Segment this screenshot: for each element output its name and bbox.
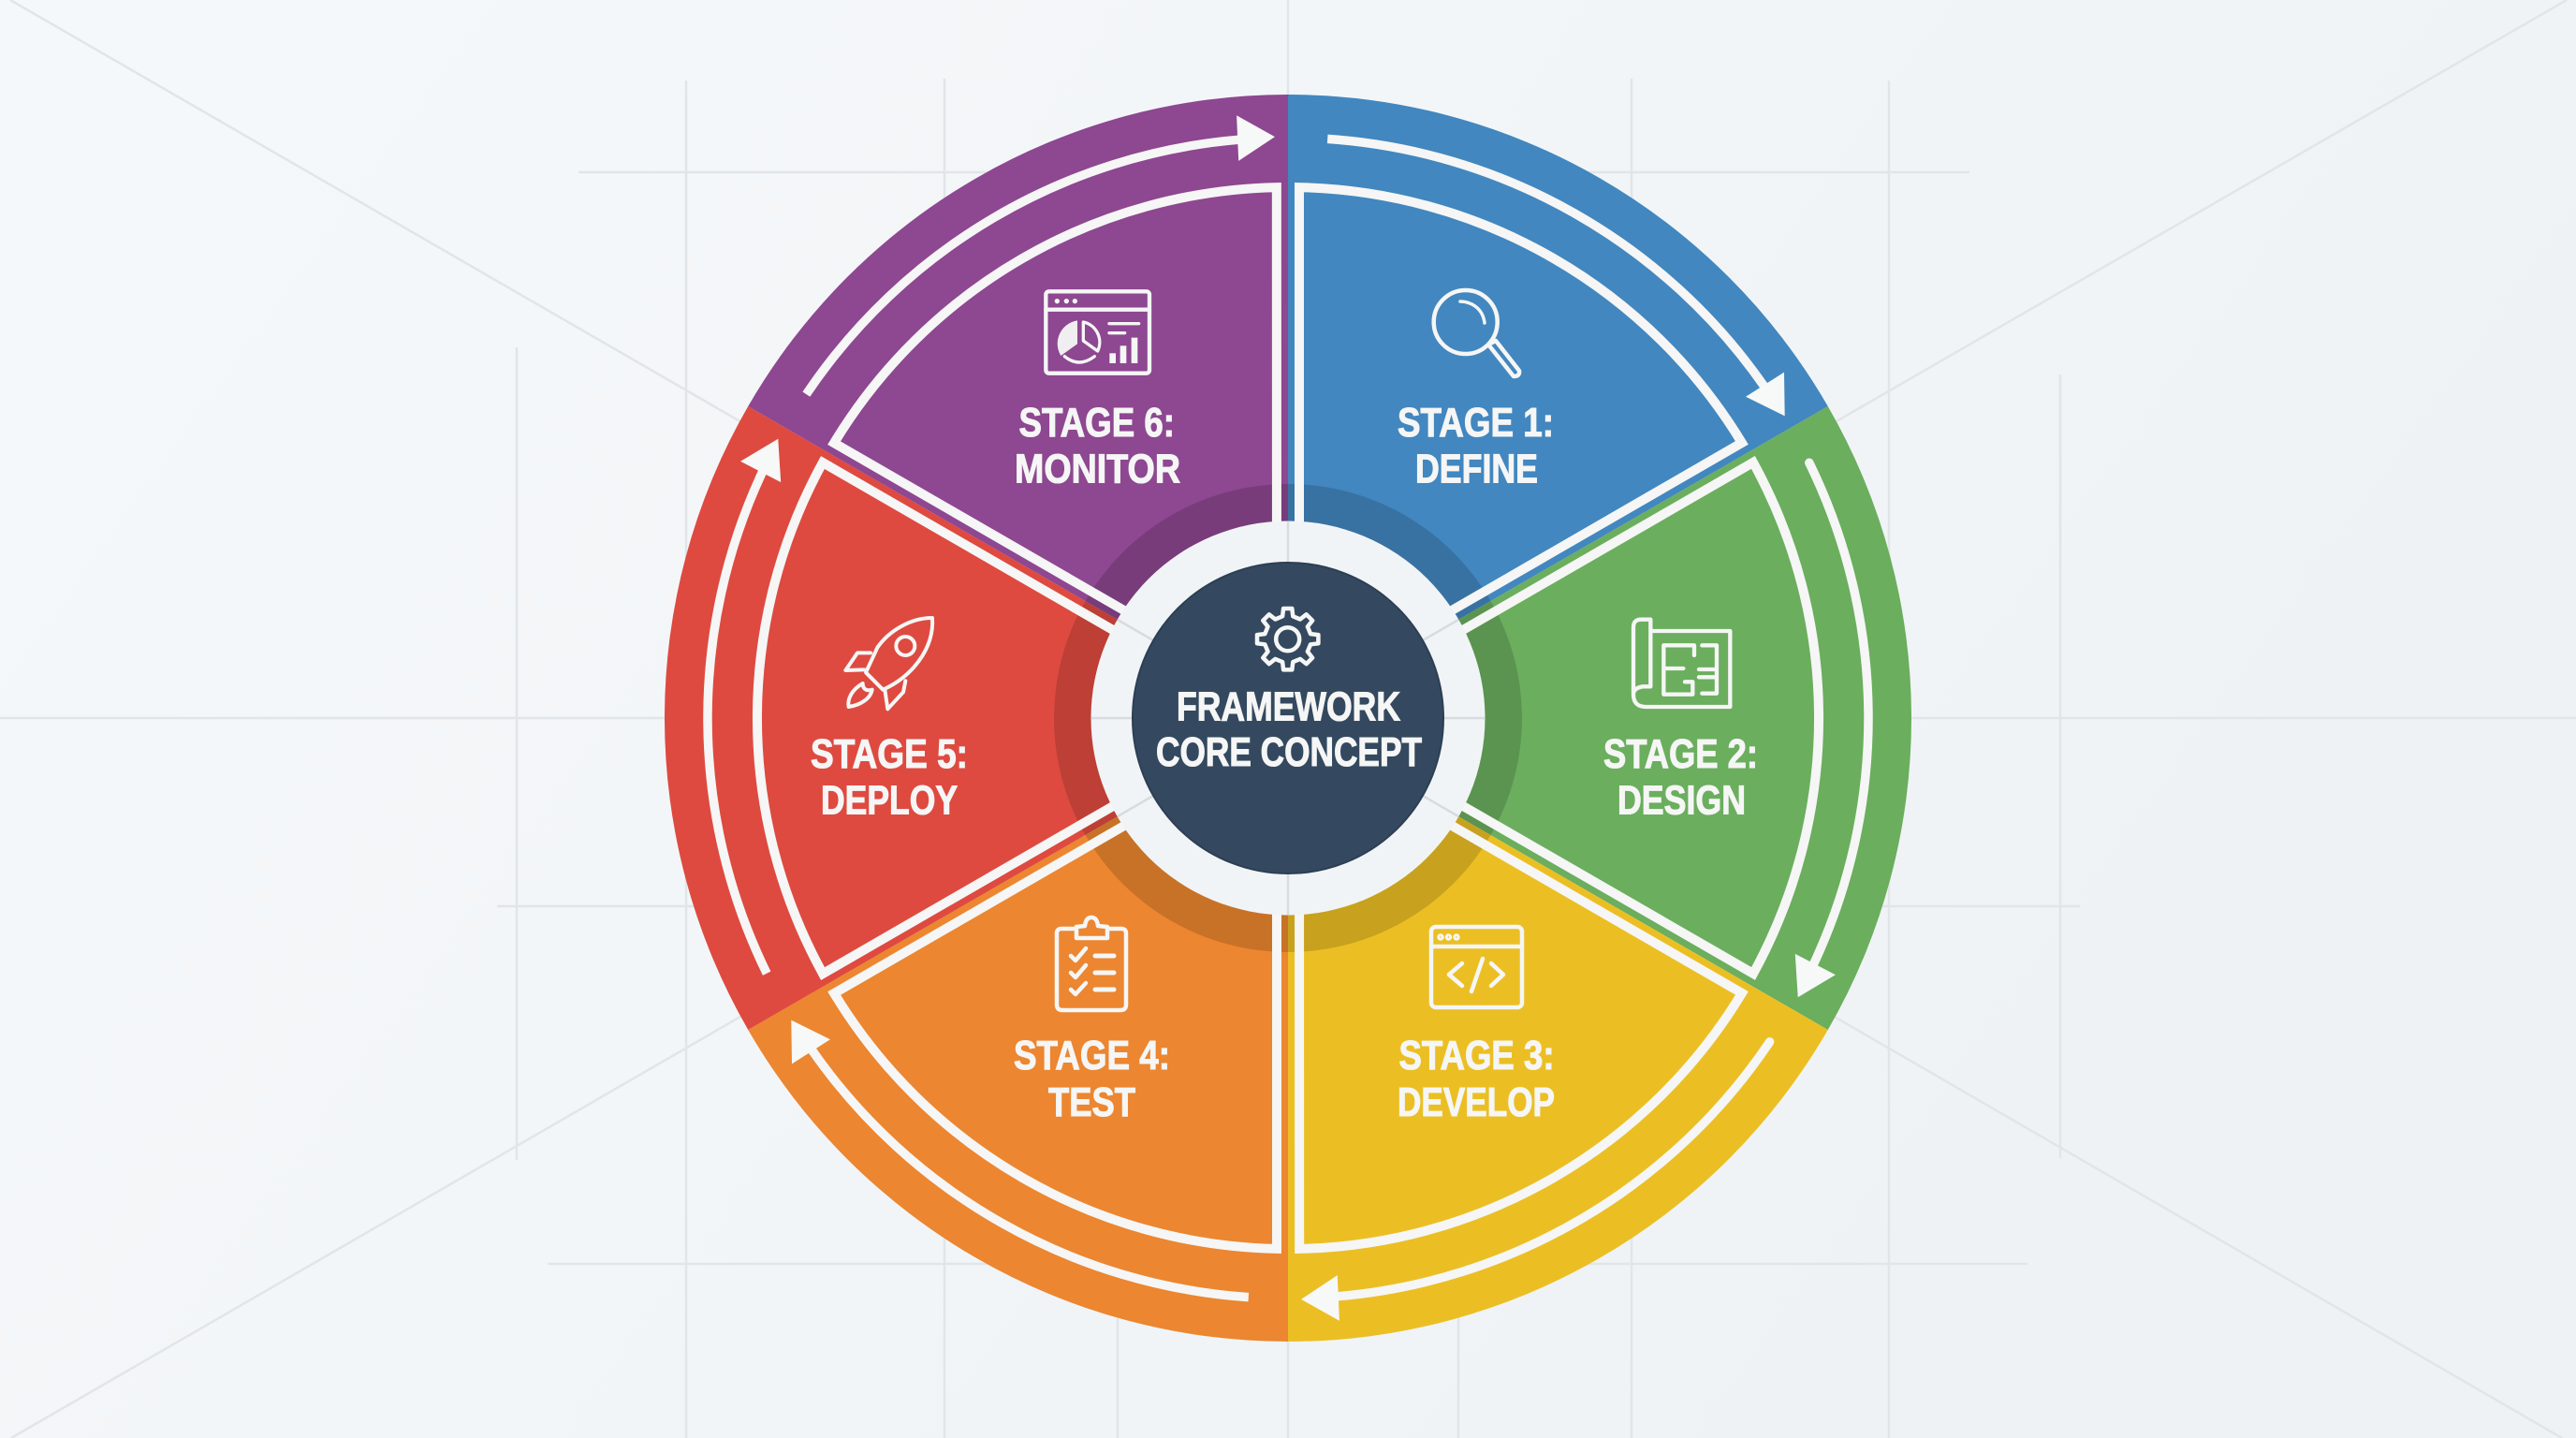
icon: code window xyxy=(1431,927,1522,1007)
label: stage 2 xyxy=(1603,731,1758,824)
label: stage 4 xyxy=(1014,1033,1170,1125)
stage 5 outline xyxy=(602,334,1266,974)
label: stage 5: STAGE 5: xyxy=(811,731,968,777)
arrow: stage 3 to stage 4 xyxy=(1301,903,1770,1438)
arrow: stage 5 to stage 6 xyxy=(538,439,1007,974)
label: stage 6: STAGE 6: xyxy=(1018,400,1175,446)
label: stage 1 xyxy=(1398,400,1554,492)
label: stage 3 xyxy=(1398,1033,1555,1125)
icon: blueprint xyxy=(1633,620,1730,707)
hub title xyxy=(1156,683,1422,775)
label: stage 5 xyxy=(811,731,968,824)
arrow: stage 2 to stage 3 xyxy=(1569,462,2038,997)
icon: clipboard checklist xyxy=(1057,917,1126,1010)
arrow: stage 1 to stage 2 xyxy=(1327,139,1785,416)
stage 2 outline xyxy=(1310,462,1974,1102)
panel: stage 6 monitor xyxy=(748,0,1558,718)
hub: core concept xyxy=(1091,521,1485,916)
label: stage 2: STAGE 2: xyxy=(1603,731,1758,777)
label: stage 3: STAGE 3: xyxy=(1398,1033,1554,1078)
label: stage 2: DESIGN xyxy=(1617,777,1746,824)
icon: dashboard window xyxy=(1046,291,1149,374)
label: stage 3: DEVELOP xyxy=(1398,1079,1555,1125)
label: stage 4: TEST xyxy=(1048,1079,1135,1125)
stage 4 outline xyxy=(834,738,1277,1249)
panel: stage 2 design xyxy=(1288,406,2098,1186)
icon: gear xyxy=(1257,609,1318,669)
stage 3 outline xyxy=(1078,738,1742,1376)
icon: rocket xyxy=(845,618,932,709)
label: stage 4: STAGE 4: xyxy=(1014,1033,1170,1078)
stage 6 outline xyxy=(834,60,1498,698)
label: stage 1: DEFINE xyxy=(1415,446,1538,492)
panel: stage 4 test xyxy=(748,718,1288,1342)
hub disc xyxy=(1133,563,1443,873)
label: stage 6 xyxy=(1015,400,1180,492)
panel: stage 5 deploy xyxy=(478,250,1288,1030)
label: stage 5: DEPLOY xyxy=(821,777,958,824)
hub title: CORE CONCEPT xyxy=(1156,729,1422,775)
hub title: FRAMEWORK xyxy=(1177,683,1400,730)
label: stage 6: MONITOR xyxy=(1015,446,1180,492)
panel: stage 3 develop xyxy=(1018,718,1828,1438)
arrow: stage 6 to stage 1 xyxy=(806,0,1275,533)
stage 1 outline xyxy=(1299,187,1742,698)
hub ring xyxy=(1091,521,1485,916)
label: stage 1: STAGE 1: xyxy=(1398,400,1554,446)
icon: magnifying glass xyxy=(1434,290,1519,376)
panel: stage 1 define xyxy=(1288,95,1828,718)
arrow: stage 4 to stage 5 xyxy=(791,1020,1249,1298)
